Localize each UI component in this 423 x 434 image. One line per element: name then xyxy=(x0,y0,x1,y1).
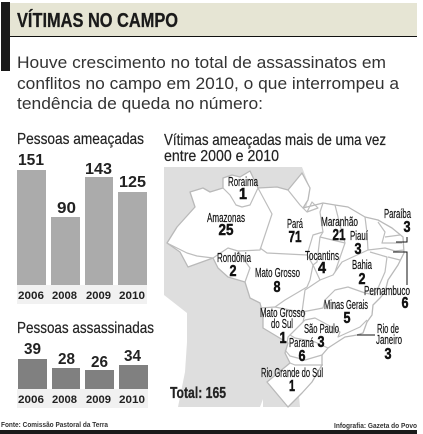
panel: pessoas ameaçadas bar chart: 143 xyxy=(85,161,112,178)
state labels and values: Rio de xyxy=(377,322,399,336)
state labels and values: Amazonas xyxy=(207,211,245,225)
map of Brazil xyxy=(164,167,411,407)
leader lines xyxy=(357,237,407,335)
state labels and values: Tocantins xyxy=(305,249,339,263)
panel: pessoas ameaçadas bar chart: 2006 xyxy=(18,290,44,302)
state labels and values: 1 xyxy=(239,186,247,203)
state labels and values: 3 xyxy=(404,219,411,236)
title banner xyxy=(1,2,417,71)
state labels and values: Paraná xyxy=(289,336,314,350)
state labels and values: 5 xyxy=(344,310,351,327)
state labels and values: 3 xyxy=(318,334,325,351)
panel: pessoas assassinadas bar chart: 34 xyxy=(124,348,141,365)
state labels and values: 21 xyxy=(332,227,346,244)
panel: pessoas assassinadas bar chart: 2010 xyxy=(119,394,145,406)
state labels and values: 3 xyxy=(384,346,392,363)
title banner: VÍTIMAS NO CAMPO xyxy=(17,9,178,32)
state labels and values: Minas Gerais xyxy=(324,298,368,312)
intro text: Houve crescimento no total de assassinatos em xyxy=(17,54,386,72)
map heading: Vítimas ameaçadas mais de uma vez xyxy=(164,132,386,149)
state labels and values: Janeiro xyxy=(376,333,402,347)
state labels and values: 2 xyxy=(230,263,236,280)
neighbouring countries xyxy=(164,167,310,407)
state labels and values: 6 xyxy=(298,348,306,365)
panel: pessoas assassinadas bar chart: 39 xyxy=(24,341,41,358)
intro text: tendência de queda no número: xyxy=(17,95,263,113)
state labels and values: Mato Grosso xyxy=(255,266,300,280)
panel: pessoas ameaçadas bar chart: Pessoas ameaçadas xyxy=(17,131,144,148)
state labels and values: Mato Grosso xyxy=(260,306,305,320)
state labels and values: 25 xyxy=(218,222,234,239)
intro text xyxy=(17,54,400,113)
Brazil outline xyxy=(167,171,404,407)
state labels and values: Bahia xyxy=(352,258,372,272)
state labels and values: 71 xyxy=(288,229,302,246)
panel: pessoas assassinadas bar chart: 28 xyxy=(58,351,75,368)
panel: pessoas ameaçadas bar chart: 2008 xyxy=(52,290,77,302)
panel: pessoas assassinadas bar chart: Pessoas assassinadas xyxy=(17,320,154,337)
state labels and values: 4 xyxy=(318,260,326,277)
state labels and values: 8 xyxy=(274,279,281,296)
state labels and values: Pará xyxy=(287,217,303,231)
state labels and values: Roraima xyxy=(228,175,258,189)
state labels and values: do Sul xyxy=(271,317,293,331)
state borders xyxy=(167,188,404,365)
panel: pessoas ameaçadas bar chart: 125 xyxy=(119,174,146,191)
state labels and values: 1 xyxy=(289,378,295,395)
state labels and values: 1 xyxy=(280,330,287,347)
panel: pessoas assassinadas bar chart: 26 xyxy=(91,354,108,371)
panel: pessoas assassinadas bar chart: 2009 xyxy=(86,394,111,406)
state labels and values: Rondônia xyxy=(217,251,251,265)
state labels and values: Piauí xyxy=(350,229,368,243)
state labels and values: 3 xyxy=(354,241,362,258)
state labels and values: São Paulo xyxy=(304,322,339,336)
panel: pessoas ameaçadas bar chart xyxy=(17,131,147,304)
state labels and values: 2 xyxy=(358,271,366,288)
state labels and values: 6 xyxy=(402,295,409,312)
state labels and values xyxy=(207,175,411,395)
panel: pessoas assassinadas bar chart: 2008 xyxy=(52,394,77,406)
panel: pessoas ameaçadas bar chart: 2009 xyxy=(86,290,111,302)
source credit: Fonte: Comissão Pastoral da Terra xyxy=(1,420,109,429)
state labels and values: Maranhão xyxy=(321,215,358,229)
panel: pessoas assassinadas bar chart: 2006 xyxy=(18,394,44,406)
map heading: entre 2000 e 2010 xyxy=(164,148,279,165)
bottom rule xyxy=(0,430,417,434)
map total: Total: 165 xyxy=(170,385,226,402)
map heading xyxy=(164,132,386,165)
panel: pessoas ameaçadas bar chart: 2010 xyxy=(119,290,145,302)
panel: pessoas ameaçadas bar chart: 151 xyxy=(18,152,44,169)
intro text: conflitos no campo em 2010, o que interrompeu a xyxy=(17,75,400,93)
state labels and values: Rio Grande do Sul xyxy=(261,366,323,380)
panel: pessoas ameaçadas bar chart: 90 xyxy=(57,200,76,217)
panel: pessoas assassinadas bar chart xyxy=(17,320,154,408)
